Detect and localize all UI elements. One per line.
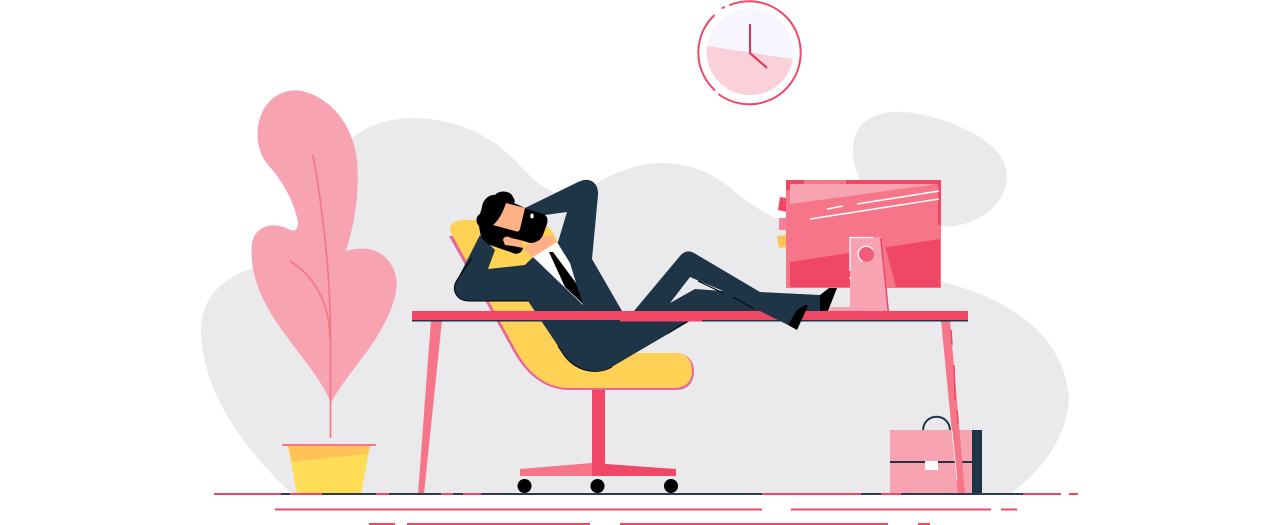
right leg dashes — [951, 330, 958, 423]
ear and hand — [503, 237, 523, 248]
sticky notes — [777, 197, 787, 248]
plant — [252, 90, 397, 494]
lower body in front of desk — [543, 305, 807, 371]
pot rim — [282, 444, 376, 446]
chair shell — [450, 220, 692, 388]
sticky note: yellow — [777, 235, 787, 248]
right leg highlight — [952, 430, 957, 480]
suit outline at elbow — [455, 258, 528, 301]
desk board — [412, 311, 968, 320]
briefcase — [890, 417, 982, 494]
chair base right — [592, 463, 676, 476]
ground line red segments — [214, 493, 1078, 495]
screen frame — [786, 180, 941, 288]
briefcase handle — [923, 417, 950, 431]
chair shell outline — [449, 236, 694, 390]
leaf veins and stem — [290, 155, 330, 438]
stand shadow — [880, 238, 896, 287]
lower leg over desk — [758, 310, 802, 325]
suit body and arms — [455, 180, 820, 371]
monitor — [777, 180, 941, 311]
sticky note: pink — [779, 218, 787, 230]
man — [455, 180, 837, 371]
clock face — [706, 8, 794, 96]
floor lines — [214, 494, 1078, 524]
screen frame top accents — [786, 180, 941, 225]
ground line navy segments — [281, 493, 1023, 495]
sticky note: red — [778, 197, 787, 212]
stand — [850, 237, 889, 311]
face — [493, 203, 525, 232]
clock — [698, 1, 801, 104]
third floor line — [369, 523, 930, 525]
desk legs — [418, 320, 965, 494]
clock face shaded part — [707, 46, 793, 95]
torso outline — [558, 322, 687, 371]
screen lines — [810, 191, 939, 219]
torso below desk — [543, 322, 688, 371]
desk underside — [412, 320, 968, 322]
hair and beard — [476, 191, 548, 254]
chair pole — [592, 388, 605, 466]
briefcase body — [890, 430, 972, 494]
screen highlight — [790, 184, 938, 204]
background blob: small — [853, 112, 1007, 227]
shirt — [533, 242, 583, 305]
briefcase strap — [890, 461, 972, 463]
pot shade — [288, 446, 370, 462]
shoe: lower foot — [788, 305, 807, 330]
chair — [449, 220, 694, 493]
chair base left — [520, 463, 592, 476]
power button arc — [858, 246, 873, 262]
background blob: large — [201, 118, 1069, 494]
leg dashes — [698, 281, 763, 314]
power button — [859, 247, 874, 262]
desk top — [412, 311, 968, 322]
left desk leg — [418, 320, 442, 494]
knee gap — [670, 277, 723, 303]
right desk leg — [941, 320, 965, 494]
briefcase clasp — [925, 461, 938, 470]
briefcase side — [972, 430, 982, 494]
monitor base — [828, 307, 860, 311]
clock hands — [750, 24, 767, 68]
shoe: upper foot — [820, 285, 837, 311]
eye — [530, 214, 534, 218]
pot — [288, 446, 370, 494]
screen lower band — [790, 239, 940, 287]
neck — [523, 235, 557, 258]
leaf — [252, 90, 397, 403]
tie — [549, 252, 583, 304]
chair wheels — [518, 479, 678, 493]
desk underside red part — [620, 320, 702, 322]
clock ring — [698, 1, 801, 104]
second floor line — [275, 508, 1017, 510]
stand edge — [880, 238, 889, 311]
stand highlight — [850, 238, 873, 279]
